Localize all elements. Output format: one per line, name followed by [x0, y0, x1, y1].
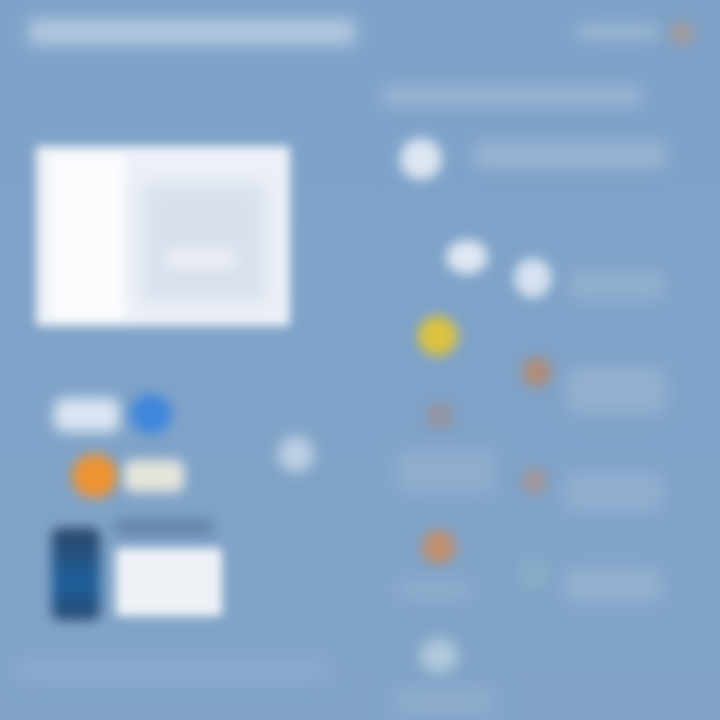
text block: node right	[568, 270, 666, 300]
title bar	[28, 19, 356, 45]
icon: muted node centre	[426, 402, 454, 430]
footer text left	[16, 660, 330, 680]
icon: white node top	[400, 138, 442, 180]
icon: phone	[52, 528, 100, 620]
icon: blue circle	[130, 394, 172, 434]
button: white pill	[54, 398, 120, 432]
text block: muted right	[564, 472, 664, 512]
icon: orange circle	[72, 454, 118, 498]
icon: pale node bottom	[420, 638, 458, 674]
icon: white node left	[446, 240, 488, 274]
document content highlight	[166, 250, 236, 268]
document sidebar	[50, 154, 124, 320]
icon: white node right	[514, 258, 552, 298]
text block: teal	[564, 568, 662, 602]
document content chart	[142, 182, 266, 302]
icon: orange node right	[522, 357, 552, 387]
panel: screenshot document	[30, 139, 296, 333]
text block: centre	[396, 448, 496, 494]
header icon: orange dot	[670, 22, 694, 44]
text block: bottom	[394, 688, 494, 716]
icon: pale circle	[278, 436, 314, 472]
text block: orange right	[566, 366, 666, 414]
label above card	[114, 520, 214, 534]
icon: orange node lower	[422, 530, 456, 564]
icon: muted node right	[522, 468, 548, 494]
text block: top	[474, 141, 666, 169]
header right label	[576, 24, 660, 40]
heading right	[382, 87, 642, 105]
card: white	[116, 548, 222, 616]
button: cream pill	[124, 460, 184, 492]
text block: lower	[396, 580, 472, 600]
document background	[36, 146, 290, 326]
icon: yellow node	[418, 316, 458, 356]
icon: teal node	[518, 558, 550, 590]
